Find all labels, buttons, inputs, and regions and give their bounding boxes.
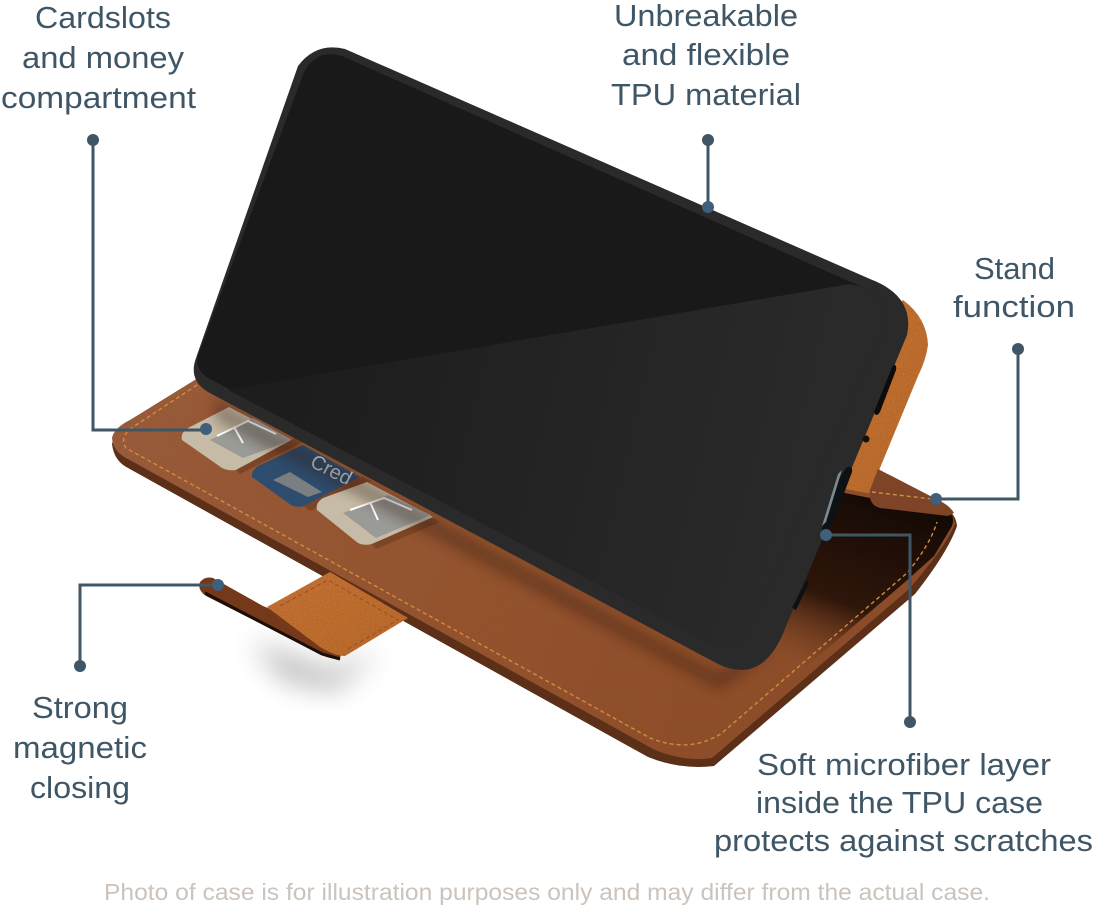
label: cardslots [1,0,196,115]
label: microfiber layer: Soft microfiber layer [757,747,1051,782]
label: magnetic closing: magnetic [13,730,147,765]
label: magnetic closing: Strong [32,690,128,725]
soft shadow under clasp [250,640,380,690]
leader line: magnetic closing [74,579,224,672]
leader line: cardslots [87,134,212,435]
label: cardslots: compartment [1,80,196,115]
label: cardslots: and money [22,40,185,75]
label: stand function: Stand [974,251,1055,286]
leader line: microfiber layer [820,529,916,728]
label: microfiber layer [714,747,1093,858]
screen reflection [228,284,885,646]
label: microfiber layer: inside the TPU case [756,785,1043,820]
leader line: TPU material [702,134,714,213]
label: magnetic closing: closing [30,770,130,805]
wallet leather surface [112,370,955,759]
label: stand function: function [953,289,1075,324]
card slot: right membership card [317,482,440,549]
phone in black TPU case [194,47,908,670]
label: TPU material: and flexible [622,37,790,72]
label: microfiber layer: protects against scratches [714,823,1093,858]
phone screen [197,54,885,646]
product photo: phone in leather wallet case [112,47,957,767]
label: TPU material [611,0,801,112]
label: magnetic closing [13,690,147,805]
wallet interior shadow [750,492,953,672]
leader line: stand function [930,343,1024,505]
disclaimer footnote: Photo of case is for illustration purposes only and may differ from the actual case. [104,879,990,905]
phone shadow on wallet [215,398,775,690]
upright stand flap [838,300,928,502]
stand flap front leather [870,469,954,516]
label: TPU material: TPU material [611,77,801,112]
card slot: blue credit card: Cred [307,451,355,490]
label: stand function [953,251,1075,324]
card slot: blue credit card [252,445,372,511]
side buttons and ports [874,365,896,415]
label: cardslots: Cardslots [35,0,171,35]
magnetic closing strap [199,572,408,659]
wallet stitching [124,385,937,745]
wallet base edge [112,375,957,767]
card slot: left membership card [182,407,303,474]
